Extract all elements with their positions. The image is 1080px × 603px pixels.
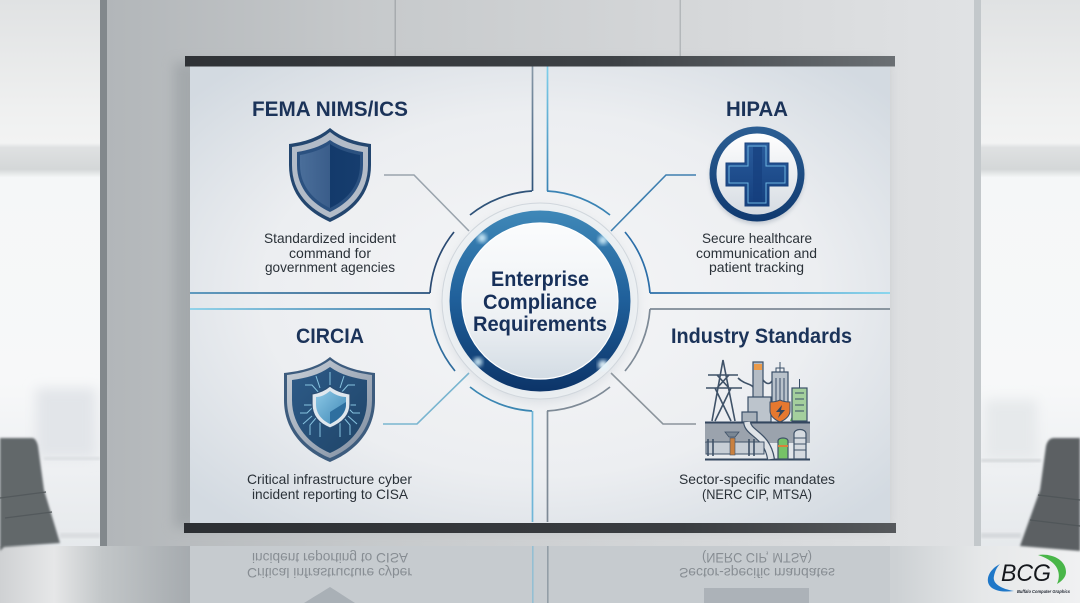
description: patient tracking <box>709 260 804 275</box>
quadrant frame lines <box>190 66 890 522</box>
connector: FEMA <box>384 175 469 231</box>
wall shadow behind screen <box>174 62 886 528</box>
hub title: Compliance <box>483 291 597 314</box>
panel: HIPAA <box>696 98 817 275</box>
description <box>247 472 412 502</box>
floor with reflection: Critical infrastructure cyber <box>247 565 412 580</box>
presentation screen panel <box>190 66 890 523</box>
logo: BCG <box>988 555 1070 594</box>
description: Standardized incident <box>264 231 396 246</box>
connector: CIRCIA <box>383 373 469 424</box>
panel: FEMA NIMS/ICS <box>252 98 408 275</box>
logo: BCG: Buffalo Computer Graphics <box>1017 589 1070 594</box>
icon: industrial infrastructure <box>705 360 810 460</box>
heading: CIRCIA <box>296 325 364 348</box>
left chair <box>0 438 60 551</box>
right chair <box>1020 438 1080 551</box>
description: incident reporting to CISA <box>252 487 409 502</box>
panel: Industry Standards <box>671 325 852 502</box>
icon: cyber shield <box>284 357 375 462</box>
description: Secure healthcare <box>702 231 812 246</box>
connector: Industry <box>611 373 696 424</box>
description <box>696 231 817 275</box>
description <box>264 231 396 275</box>
icon: shield <box>289 128 371 222</box>
description: communication and <box>696 246 817 261</box>
connector: HIPAA <box>611 175 696 231</box>
hub title: Requirements <box>473 313 607 336</box>
heading: Industry Standards <box>671 325 852 348</box>
description: command for <box>289 246 371 261</box>
hub title <box>473 268 607 336</box>
icon: medical cross <box>710 126 804 224</box>
description <box>679 472 835 502</box>
hub title: Enterprise <box>491 268 589 291</box>
description: government agencies <box>265 260 395 275</box>
floor with reflection: incident reporting to CISA <box>252 550 409 565</box>
description: (NERC CIP, MTSA) <box>702 487 812 502</box>
description: Sector-specific mandates <box>679 472 835 487</box>
heading: FEMA NIMS/ICS <box>252 98 408 121</box>
center hub <box>442 203 638 401</box>
bottom roller bar <box>184 523 896 533</box>
floor with reflection <box>0 546 1080 603</box>
panel: CIRCIA <box>247 325 412 502</box>
floor with reflection: Sector-specific mandates <box>679 565 835 580</box>
top roller bar <box>185 56 895 66</box>
heading: HIPAA <box>726 98 788 121</box>
logo: BCG: BCG <box>1001 560 1051 587</box>
floor with reflection: (NERC CIP, MTSA) <box>702 550 812 565</box>
description: Critical infrastructure cyber <box>247 472 412 487</box>
